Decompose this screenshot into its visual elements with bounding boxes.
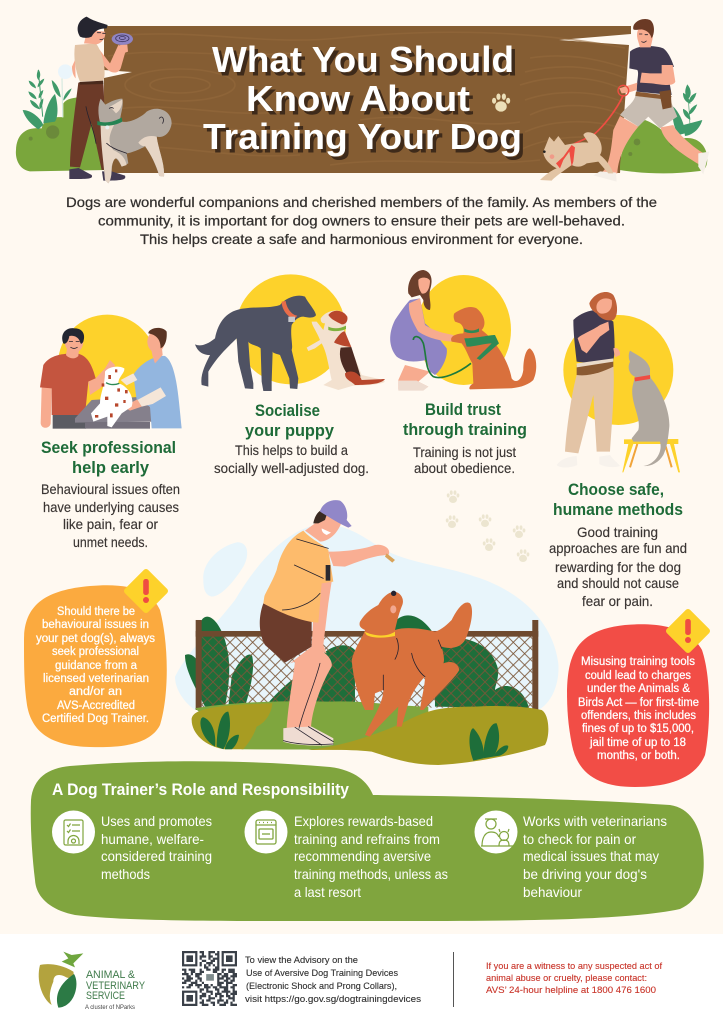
QR advisory text: visit https://go.gov.sg/dogtrainingdevices [245, 994, 421, 1005]
logo text: SERVICE [86, 990, 125, 1002]
intro text [66, 194, 657, 247]
body text: and should not cause [557, 575, 679, 591]
helpline text: If you are a witness to any suspected act of [486, 961, 662, 972]
title: What You Should [216, 42, 518, 84]
heading: A Dog Trainer’s Role and Responsibility [52, 781, 350, 799]
callout text: jail time of up to 18 [589, 737, 686, 749]
body text: unmet needs. [73, 534, 148, 550]
callout text: under the Animals & [587, 683, 690, 695]
item: works with veterinarians [474, 810, 667, 900]
body text: Behavioural issues often [41, 481, 180, 497]
body text: have underlying causes [43, 499, 179, 515]
heading: Socialise [255, 402, 320, 420]
panel: build trust through training [390, 270, 536, 476]
panel: socialise your puppy [195, 274, 385, 476]
logo mark [39, 952, 83, 1008]
illustration: woman with frisbee and husky [16, 17, 172, 183]
heading: humane methods [553, 501, 683, 519]
helpline text [486, 961, 662, 996]
body text: rewarding for the dog [555, 559, 681, 575]
callout text [36, 606, 155, 725]
item text: training methods, unless as [294, 866, 448, 882]
title: Training Your Dog [203, 116, 522, 157]
heading: Seek professional [41, 439, 176, 457]
heading: Choose safe, [568, 481, 664, 499]
icon: warning diamond [127, 572, 165, 610]
intro text: Dogs are wonderful companions and cherished members of the family. As members of the [66, 194, 657, 210]
QR code [182, 951, 237, 1006]
title: Know About [250, 82, 474, 122]
panel: seek professional help early [40, 315, 182, 550]
callout text: Misusing training tools [581, 656, 695, 668]
item text: a last resort [294, 884, 361, 900]
footer background [0, 934, 723, 1024]
logo text: A cluster of NParks [85, 1004, 136, 1011]
heading [553, 481, 683, 519]
callout: orange advice box [24, 572, 167, 747]
item: humane training [52, 810, 212, 882]
item: rewards-based training [244, 810, 448, 900]
heading [245, 402, 335, 440]
callout text: Should there be [57, 606, 135, 618]
heading [41, 439, 176, 477]
icon: checklist and dog [52, 810, 95, 854]
helpline text: AVS’ 24-hour helpline at 1800 476 1600 [486, 985, 656, 996]
item text: recommending aversive [294, 848, 431, 864]
body text: Training is not just [413, 444, 516, 460]
item text: considered training [101, 848, 212, 864]
item text [294, 813, 448, 900]
illustration: owner and vet with dalmatian [40, 315, 182, 429]
callout text: and/or an [69, 686, 122, 698]
illustration: woman shaking paw with dog [390, 270, 536, 391]
QR advisory text [245, 955, 421, 1005]
paw prints trail [446, 490, 529, 562]
body text: Good training [577, 524, 658, 540]
callout text: seek professional [52, 646, 139, 658]
title: Training Your Dog [206, 120, 526, 160]
logo text: ANIMAL & [86, 969, 136, 981]
callout text: could lead to charges [585, 670, 691, 682]
helpline text: animal abuse or cruelty, please contact: [486, 973, 647, 984]
item text: medical issues that may [523, 848, 659, 864]
icon: vet and dog [474, 810, 518, 854]
panel: a dog trainer's role and responsibility [31, 761, 704, 921]
wooden title board [104, 26, 631, 173]
body text: like pain, fear or [63, 516, 158, 532]
QR advisory text: To view the Advisory on the [245, 955, 358, 966]
illustration: man training jumping dog by fence [175, 500, 559, 765]
intro text: community, it is important for dog owners to ensure their pets are well-behaved. [98, 212, 625, 228]
title: Know About [246, 78, 470, 119]
heading: Build trust [425, 401, 501, 419]
icon: warning diamond [669, 612, 707, 650]
callout text [578, 656, 699, 762]
callout text: Birds Act — for first-time [578, 697, 699, 709]
body text [41, 481, 180, 550]
callout text: fines of up to $15,000, [582, 723, 694, 735]
body text [413, 444, 516, 476]
intro text: This helps create a safe and harmonious environment for everyone. [140, 231, 583, 247]
item text: to check for pain or [523, 831, 636, 847]
callout text: your pet dog(s), always [36, 633, 155, 645]
icon: paw on board [492, 93, 510, 112]
callout: red legal warning box [567, 612, 709, 787]
item text: methods [101, 866, 150, 882]
QR advisory text: Use of Aversive Dog Training Devices [246, 968, 398, 979]
callout text: months, or both. [597, 750, 680, 762]
item text: behaviour [523, 884, 582, 900]
item text: Works with veterinarians [523, 813, 667, 829]
item text: training and refrains from [294, 831, 440, 847]
item text: Uses and promotes [101, 813, 212, 829]
heading: your puppy [245, 422, 335, 440]
callout text: guidance from a [55, 660, 138, 672]
callout text: AVS-Accredited [57, 700, 135, 712]
illustration: man running with dog on leash [540, 19, 709, 182]
item text: be driving your dog's [523, 866, 647, 882]
callout text: licensed veterinarian [43, 673, 149, 685]
heading: through training [403, 421, 527, 439]
item text [523, 813, 667, 900]
item text: Explores rewards-based [294, 813, 433, 829]
title: What You Should [212, 39, 514, 80]
body text: This helps to build a [235, 442, 348, 458]
callout text: Certified Dog Trainer. [42, 713, 149, 725]
logo text: VETERINARY [86, 980, 146, 992]
QR advisory text: (Electronic Shock and Prong Collars), [246, 981, 397, 992]
body text: fear or pain. [582, 593, 653, 609]
footer logo: animal and veterinary service [39, 952, 146, 1011]
item text: humane, welfare- [101, 831, 204, 847]
body text: about obedience. [414, 460, 515, 476]
illustration: woman with dog on stool [557, 292, 680, 472]
panel: choose safe, humane methods [549, 292, 687, 609]
icon: treat bag [244, 810, 288, 854]
logo text [85, 969, 146, 1011]
callout text: offenders, this includes [581, 710, 696, 722]
body text: approaches are fun and [549, 540, 687, 556]
body text: socially well-adjusted dog. [214, 460, 369, 476]
body text [214, 442, 369, 476]
heading [403, 401, 527, 439]
body text [549, 524, 687, 609]
illustration: grey dog and beagle [195, 274, 385, 391]
heading: help early [72, 459, 150, 477]
title [203, 39, 526, 160]
item text [101, 813, 212, 882]
callout text: behavioural issues in [42, 619, 149, 631]
